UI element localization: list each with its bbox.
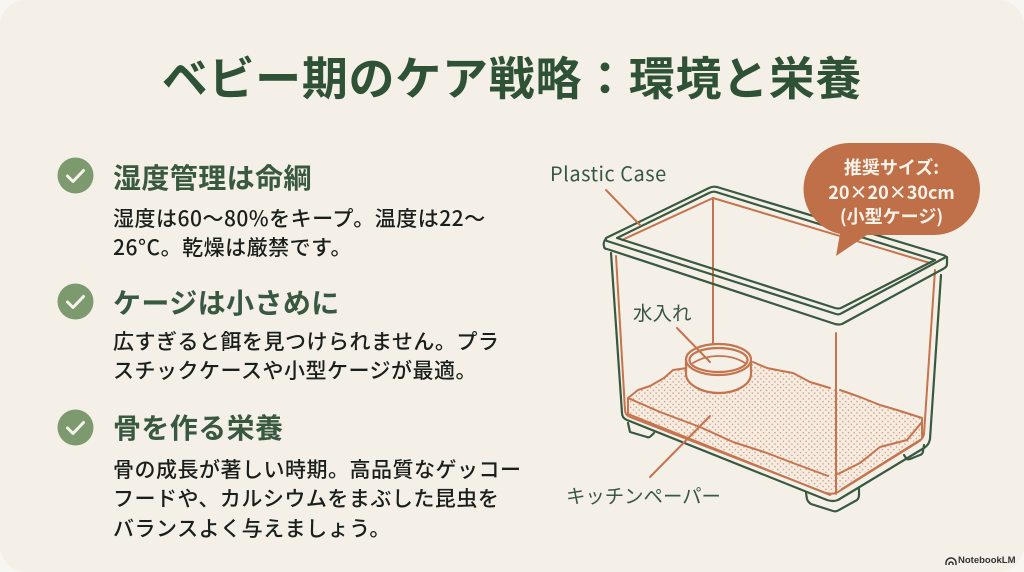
heading: humidity: 湿度管理は命綱 — [113, 157, 312, 197]
panel: humidity management — [58, 157, 486, 262]
label: plastic case: Plastic Case — [550, 158, 667, 187]
text: nutrition body — [113, 454, 522, 543]
callout: recommended size — [804, 143, 980, 256]
text: nutrition body: 骨の成長が著しい時期。高品質なゲッコー — [113, 454, 522, 484]
wordmark: NotebookLM — [958, 555, 1016, 566]
label: kitchen paper: キッチンペーパー — [566, 480, 721, 509]
callout bubble shape — [804, 143, 980, 256]
heading: nutrition: 骨を作る栄養 — [113, 407, 283, 447]
icon: check circle — [58, 410, 94, 446]
callout text: 20×20×30cm — [828, 178, 955, 204]
leader lines — [606, 190, 710, 477]
water bowl — [686, 344, 751, 393]
icon: NotebookLM mark — [945, 557, 957, 565]
callout text: (小型ケージ) — [840, 203, 943, 229]
heading: cage: ケージは小さめに — [113, 282, 340, 322]
title: ベビー期のケア戦略：環境と栄養 — [162, 43, 862, 109]
callout text — [828, 154, 955, 229]
callout text: 推奨サイズ: — [844, 154, 939, 180]
logo: NotebookLM — [945, 555, 1016, 566]
label: water bowl: 水入れ — [633, 297, 692, 326]
text: cage body: 広すぎると餌を見つけられません。プラ — [113, 326, 499, 356]
text: nutrition body: バランスよく与えましょう。 — [113, 513, 391, 543]
text: cage body — [113, 326, 499, 385]
text: nutrition body: フードや、カルシウムをまぶした昆虫を — [113, 483, 499, 513]
panel: small cage — [58, 282, 499, 385]
panel: nutrition — [58, 407, 522, 543]
text: cage body: スチックケースや小型ケージが最適。 — [113, 355, 477, 385]
icon: check circle — [58, 284, 94, 320]
case back and inner orange lines — [616, 198, 935, 495]
case feet — [628, 423, 924, 511]
case green outline — [604, 187, 947, 501]
icon: check circle — [58, 158, 94, 194]
text: humidity body: 湿度は60〜80%をキープ。温度は22〜 — [113, 203, 486, 233]
text: humidity body: 26°C。乾燥は厳禁です。 — [113, 232, 352, 262]
text: humidity body — [113, 203, 486, 262]
paper layer — [628, 362, 922, 493]
